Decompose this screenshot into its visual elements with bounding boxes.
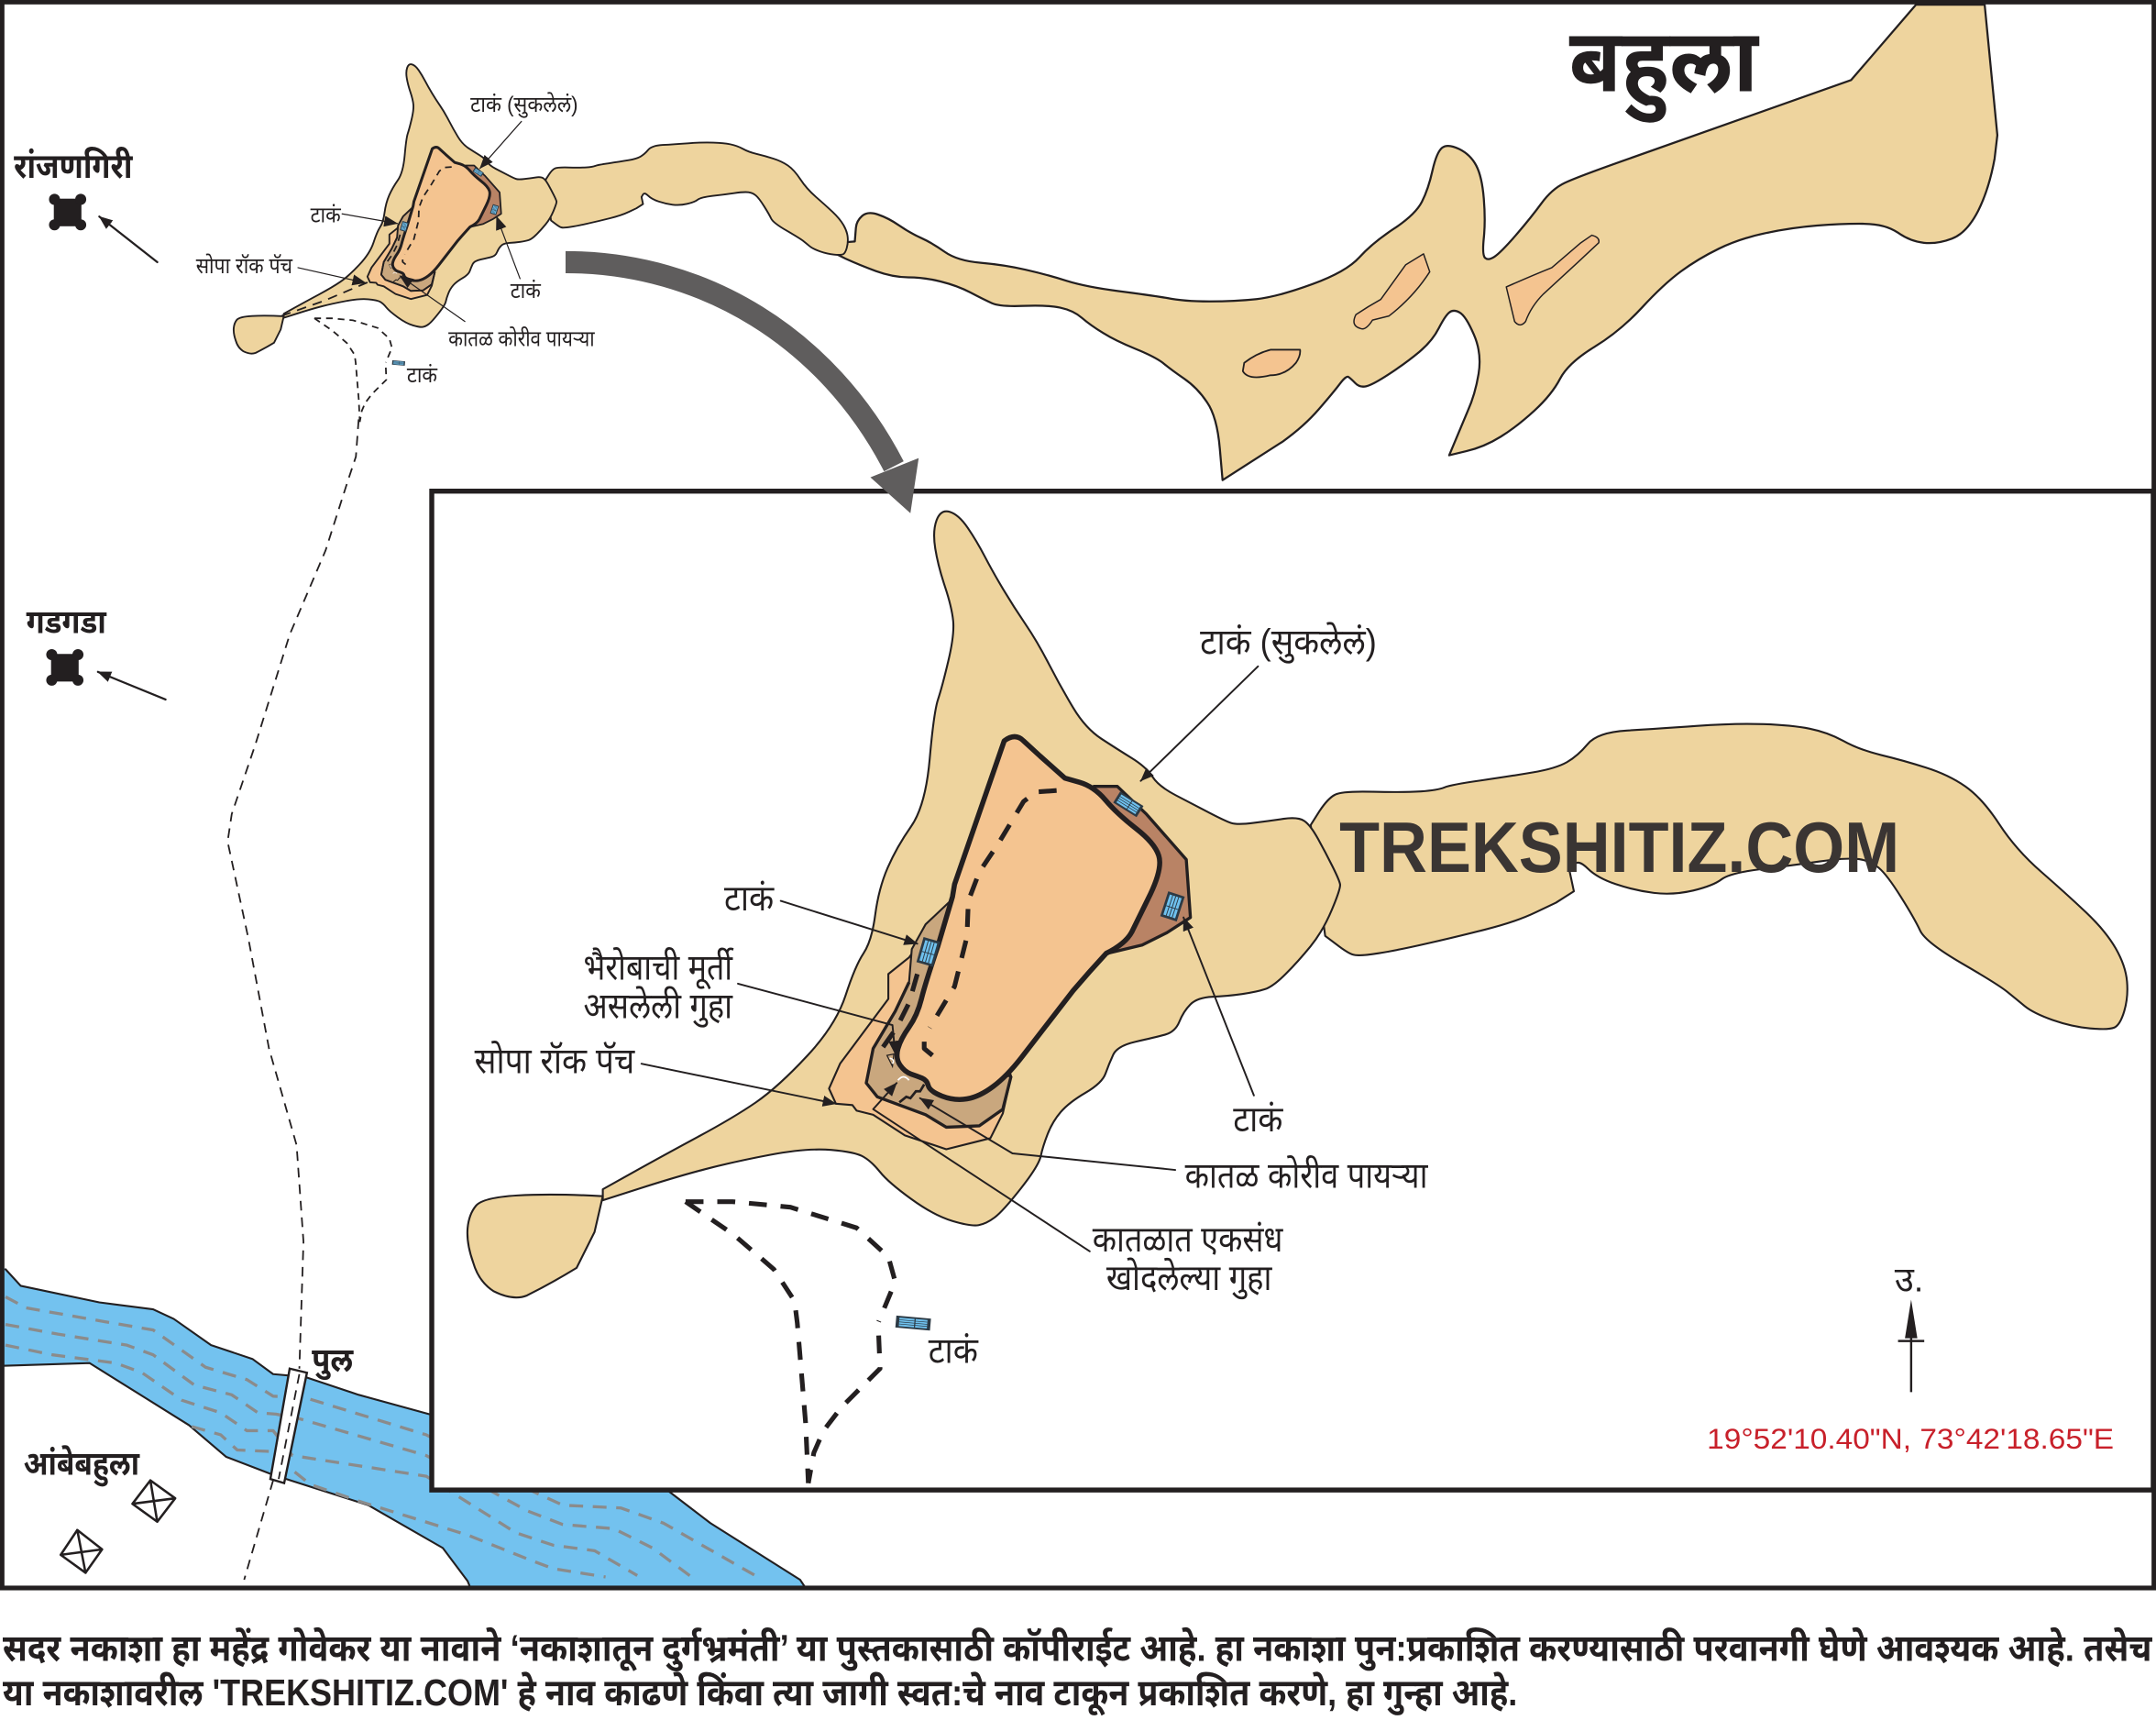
label: Gadgada: गडगडा	[27, 603, 107, 641]
small map labels: टाकं	[407, 363, 437, 388]
label: bridge: पुल	[312, 1341, 354, 1381]
inset labels: टाकं	[724, 879, 775, 919]
inset labels: कातळ कोरीव पायऱ्या	[1185, 1156, 1428, 1196]
icon: hut 1	[132, 1481, 175, 1522]
arrow to Ranjangiri	[99, 216, 158, 262]
north arrow	[1895, 1260, 1924, 1392]
small map labels: कातळ कोरीव पायऱ्या	[448, 326, 595, 352]
arrow to Gadgada	[98, 672, 166, 700]
inset panel	[432, 491, 2153, 1490]
watermark: TREKSHITIZ.COM	[1339, 807, 1899, 888]
inset labels: कातळात एकसंध	[1093, 1220, 1283, 1260]
bridge	[270, 1369, 307, 1483]
small overview fort map	[234, 64, 848, 422]
small map labels: टाकं	[511, 279, 541, 303]
inset labels: सोपा रॉक पॅच	[475, 1042, 635, 1082]
main ridge of Bahula	[833, 5, 1997, 480]
copyright note	[3, 1627, 2152, 1715]
ridge patch 3	[1506, 236, 1599, 325]
inset labels: भैरोबाची मूर्ती	[584, 946, 734, 989]
ridge patch 2	[1354, 254, 1430, 329]
inset labels	[475, 622, 1428, 1372]
inset labels: टाकं	[1233, 1100, 1283, 1140]
ridge patch 1	[1243, 349, 1300, 377]
small map labels: टाकं	[311, 203, 341, 227]
small map leader lines	[298, 121, 522, 322]
small map labels: टाकं (सुकलेलं)	[470, 92, 578, 118]
label: Ambebahula: आंबेबहुला	[24, 1444, 140, 1487]
icon: hut 2	[60, 1530, 102, 1572]
inset labels: खोदलेल्या गुहा	[1106, 1258, 1272, 1299]
long approach trail	[227, 281, 369, 1580]
big curved arrow	[566, 262, 918, 513]
copyright note: या नकाशावरील 'TREKSHITIZ.COM' हे नाव काढणे किंवा त्या जागी स्वत:चे नाव टाकून प्रकाशित करणे, हा गुन्हा आहे.	[3, 1671, 1517, 1715]
inset leader lines	[642, 667, 1258, 1251]
inset labels: टाकं (सुकलेलं)	[1200, 622, 1377, 663]
icon: fort Gadgada	[46, 649, 83, 686]
detailed fort map	[468, 512, 2128, 1483]
title: बहुला	[1569, 12, 1759, 123]
north arrow: उ.	[1895, 1260, 1923, 1298]
small map labels: सोपा रॉक पॅच	[196, 253, 293, 279]
coordinates: 19°52'10.40"N, 73°42'18.65"E	[1707, 1422, 2114, 1455]
label: Ranjangiri: रांजणगिरी	[14, 146, 133, 185]
small map labels	[196, 92, 595, 388]
inset labels: टाकं	[929, 1332, 979, 1372]
icon: fort Ranjangiri	[49, 193, 86, 230]
inset labels: असलेली गुहा	[584, 986, 733, 1028]
river	[3, 1266, 806, 1588]
